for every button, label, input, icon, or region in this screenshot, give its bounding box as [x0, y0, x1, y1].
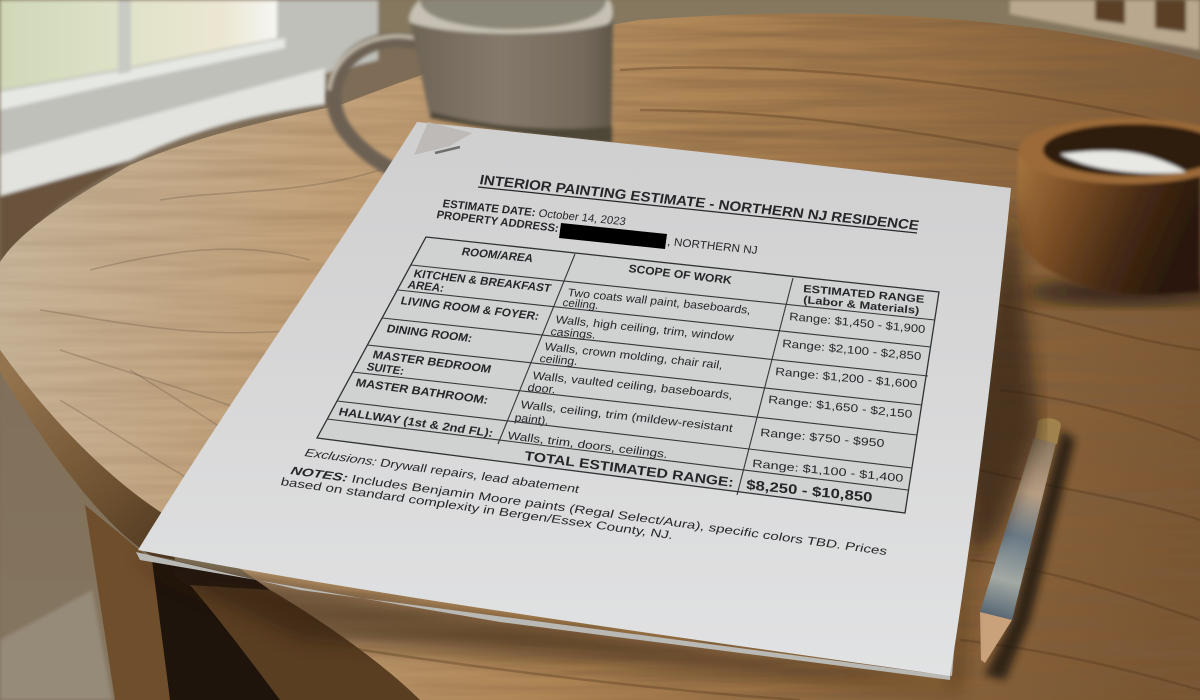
column 3: estimated ranges — [752, 283, 926, 485]
column 2: scope of work — [506, 263, 752, 461]
table front band — [190, 585, 420, 700]
table leg and underside — [85, 505, 420, 700]
mug rim — [409, 0, 613, 34]
column 3: estimated ranges: Range: $1,450 - $1,900 — [789, 311, 926, 336]
column 2: scope of work: Walls, crown molding, chair rail, — [543, 341, 724, 372]
chair rails behind table — [1010, 0, 1200, 50]
column 3: estimated ranges: Range: $1,200 - $1,600 — [775, 366, 918, 391]
pencil ferrule — [1035, 418, 1061, 444]
column 1: rooms: DINING ROOM: — [385, 323, 473, 345]
redaction bar — [559, 223, 667, 249]
pencil shadow — [985, 430, 1075, 680]
address suffix: , NORTHERN NJ — [667, 236, 758, 257]
column 2: scope of work: ceiling. — [561, 297, 600, 312]
window glass — [0, 0, 277, 90]
mug body — [411, 20, 615, 130]
table rules — [327, 254, 935, 495]
column 2: scope of work: casings. — [549, 326, 597, 342]
total row: $8,250 - $10,850 — [746, 477, 873, 505]
column 1: rooms: MASTER BEDROOM — [371, 349, 492, 376]
column 1: rooms: SUITE: — [365, 361, 405, 378]
pencil — [980, 418, 1075, 680]
column 2: scope of work: Two coats wall paint, baseboards, — [566, 287, 752, 317]
paper shadow — [135, 200, 1040, 690]
pencil tip — [980, 612, 1012, 663]
column 3: estimated ranges: Range: $2,100 - $2,850 — [782, 338, 922, 363]
baseboard — [0, 590, 112, 700]
mug handle — [329, 36, 415, 174]
column 2: scope of work: Walls, ceiling, trim (mildew-resistant — [519, 399, 735, 435]
salt bowl — [1017, 118, 1200, 306]
column 3: estimated ranges: Range: $1,100 - $1,400 — [752, 458, 904, 485]
mug — [329, 0, 613, 174]
bowl interior — [1043, 124, 1200, 176]
column 3: estimated ranges: ESTIMATED RANGE — [803, 283, 925, 306]
column 1: rooms: LIVING ROOM & FOYER: — [399, 295, 540, 323]
upper back wall — [375, 0, 1200, 45]
window frame — [0, 0, 378, 155]
column 2: scope of work: paint). — [513, 412, 550, 428]
paper clip mark — [435, 147, 460, 153]
window mullion — [118, 0, 131, 74]
window inner sash highlight — [0, 38, 285, 110]
bowl shadow — [1025, 278, 1200, 306]
mug base band — [430, 112, 612, 143]
total row: TOTAL ESTIMATED RANGE: — [524, 448, 735, 490]
column 3: estimated ranges: Range: $750 - $950 — [760, 427, 885, 450]
folded corner — [414, 122, 472, 155]
table rounded edge — [0, 350, 175, 560]
exclusions and notes — [279, 447, 889, 558]
column 1: rooms: KITCHEN & BREAKFAST — [412, 268, 553, 295]
column 2: scope of work: SCOPE OF WORK — [627, 263, 733, 287]
column 1: rooms: HALLWAY (1st & 2nd FL): — [337, 406, 494, 440]
column 2: scope of work: ceiling. — [538, 353, 579, 368]
column 3: estimated ranges: Range: $1,650 - $2,150 — [768, 394, 913, 421]
column 1: rooms: MASTER BATHROOM: — [354, 377, 489, 407]
document heading — [435, 172, 920, 257]
wall between sill and table — [0, 160, 130, 262]
column 2: scope of work: Walls, trim, doors, ceilings. — [506, 430, 669, 461]
column 3: estimated ranges: (Labor & Materials) — [803, 294, 920, 317]
total row — [524, 448, 873, 505]
column 1: rooms: ROOM/AREA — [460, 246, 534, 265]
estimate table — [317, 237, 939, 513]
title: INTERIOR PAINTING ESTIMATE - NORTHERN NJ RESIDENCE — [478, 172, 920, 233]
column 2: scope of work: Walls, high ceiling, trim, window — [554, 314, 736, 344]
exclusions: Exclusions: Drywall repairs, lead abatement — [303, 447, 582, 496]
bowl rim — [1018, 118, 1200, 184]
bowl body — [1017, 150, 1200, 295]
under sheet edge — [136, 552, 954, 680]
salt — [1060, 151, 1186, 173]
pencil barrel — [980, 438, 1056, 620]
estimate date: ESTIMATE DATE: October 14, 2023 — [441, 198, 627, 228]
window sill — [0, 68, 325, 196]
notes line 1: NOTES: Includes Benjamin Moore paints (Regal Select/Aura), specific colors TBD. Prices — [289, 465, 889, 558]
property address: PROPERTY ADDRESS: — [435, 209, 560, 235]
column 2: scope of work: door. — [526, 382, 557, 396]
paper sheet — [138, 122, 1011, 676]
title underline — [478, 187, 917, 233]
table background — [317, 237, 939, 513]
column 1: rooms: AREA: — [406, 279, 445, 295]
column 2: scope of work: Walls, vaulted ceiling, baseboards, — [531, 370, 734, 402]
notes line 2: based on standard complexity in Bergen/Essex County, NJ. — [279, 476, 674, 542]
column 1: rooms — [337, 246, 553, 440]
mug interior — [417, 0, 606, 28]
